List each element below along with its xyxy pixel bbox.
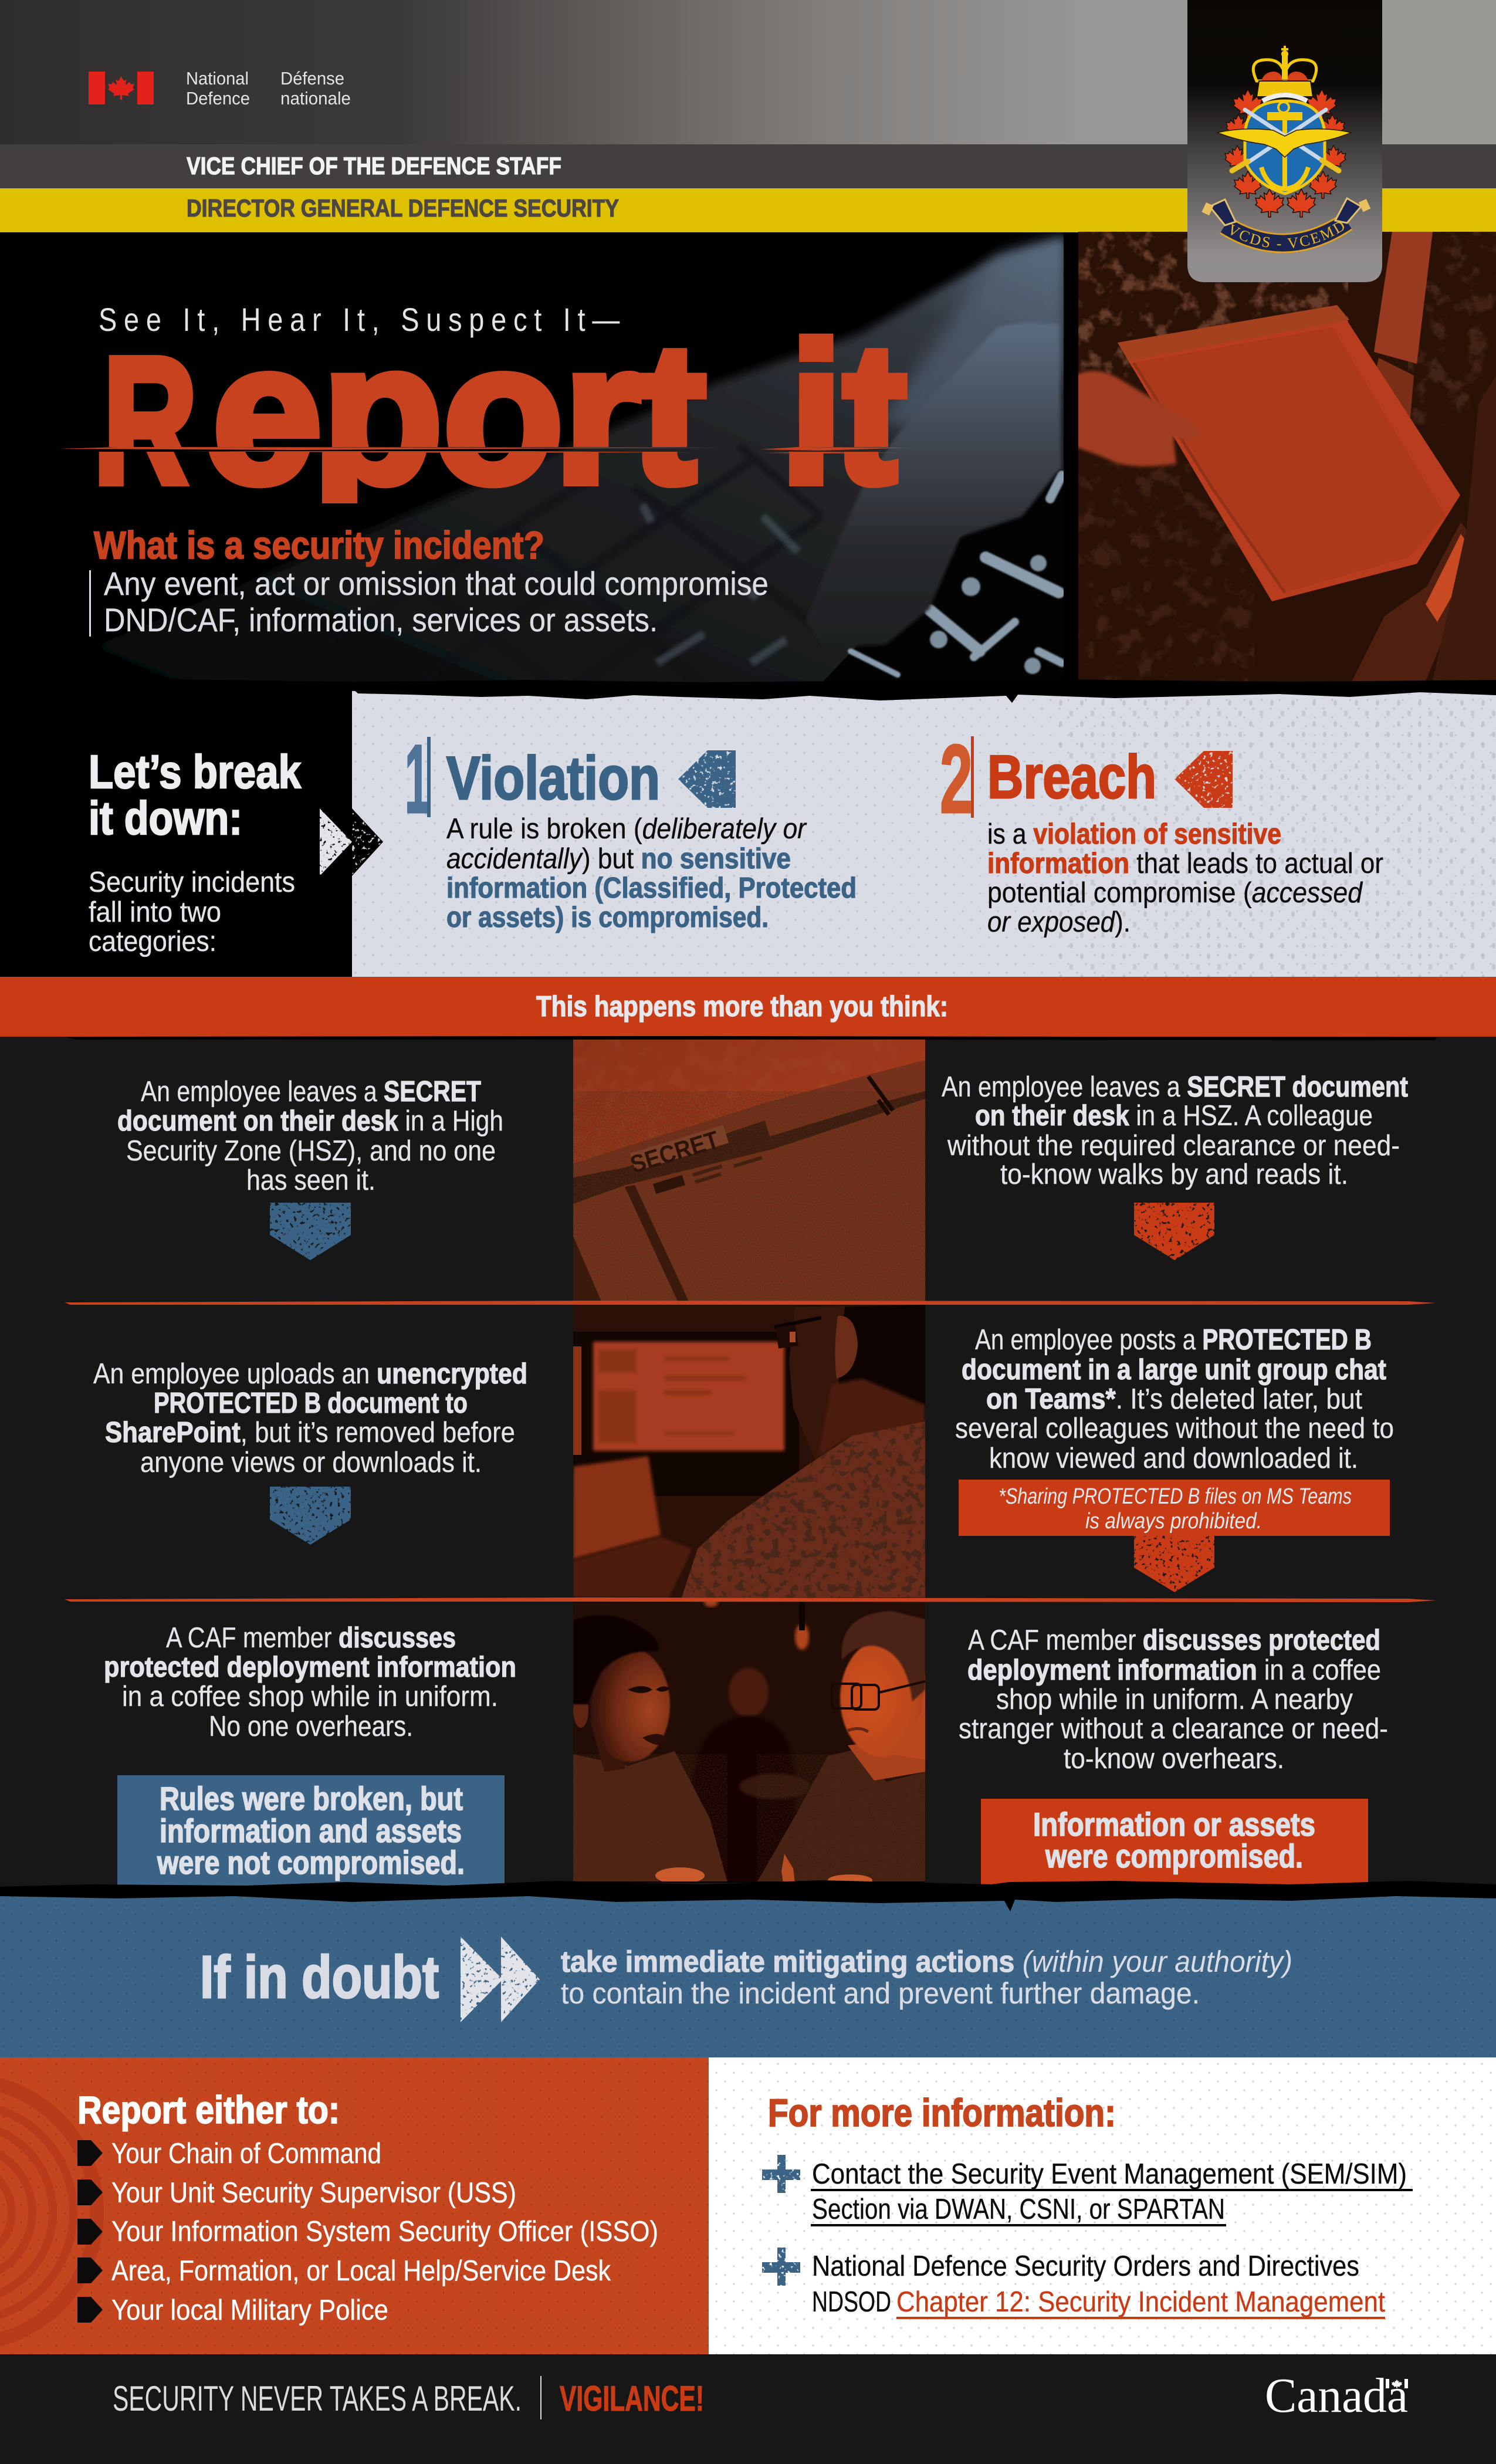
signature: department name	[186, 68, 351, 109]
arrow: blue down 2	[270, 1487, 351, 1545]
category 1: violation: A rule is broken (deliberately or	[446, 813, 807, 845]
arrow: orange down 2	[1134, 1536, 1214, 1592]
arrow: blue down 1	[270, 1203, 351, 1260]
torn edge: bottom	[0, 1880, 1496, 1911]
list: report contacts: Your Information System Security Officer (ISSO)	[111, 2216, 658, 2248]
photo: members in a coffee shop	[573, 1597, 925, 1886]
icon: plus 1	[762, 2155, 800, 2193]
scenario 1 violation: has seen it.	[246, 1165, 375, 1196]
shield	[1245, 101, 1325, 194]
eagle wings	[1217, 129, 1351, 157]
scenario 3 violation: protected deployment information	[104, 1651, 516, 1683]
callout: rules were broken: were not compromised.	[157, 1844, 465, 1881]
fingerprint rings	[0, 2080, 97, 2344]
title: Report it: eport	[212, 302, 706, 526]
link: orders and directives: National Defence Security Orders and Directives	[812, 2250, 1359, 2282]
panel: for more information: For more information:	[768, 2091, 1116, 2134]
list: report contacts: Area, Formation, or Local Help/Service Desk	[111, 2255, 611, 2287]
category 2: breach: is a violation of sensitive	[987, 818, 1281, 850]
title: Report it	[59, 333, 910, 503]
callout: information was compromised: Information or assets	[1033, 1806, 1315, 1843]
band: vice chief	[0, 144, 1496, 188]
panel: categories	[320, 691, 1496, 977]
scenario 3 breach: to-know overhears.	[1064, 1743, 1284, 1775]
header gradient band	[0, 0, 1496, 144]
list: report contacts: Your local Military Police	[111, 2294, 388, 2326]
divider: row 1	[65, 1301, 1436, 1305]
link: contact SEM/SIM: Contact the Security Event Management (SEM/SIM)	[812, 2158, 1407, 2190]
scenario 1 violation: Security Zone (HSZ), and no one	[126, 1135, 496, 1167]
text: take immediate actions: take immediate mitigating actions (within your authority)	[561, 1945, 1292, 1978]
text: take immediate actions	[561, 1945, 1292, 2010]
photo: man at monitors	[573, 1305, 925, 1597]
slogan: SECURITY NEVER TAKES A BREAK.	[113, 2379, 522, 2418]
note: sharing protected b: is always prohibited.	[1085, 1509, 1262, 1534]
scenario 3 breach: stranger without a clearance or need-	[959, 1713, 1388, 1745]
divider: row 2	[65, 1597, 1436, 1602]
scenario 3 violation: in a coffee shop while in uniform.	[122, 1681, 498, 1712]
scenario 1 breach: An employee leaves a SECRET document	[942, 1071, 1408, 1103]
photo: secret document on desk	[573, 1040, 925, 1301]
scenario 1 breach: without the required clearance or need-	[947, 1130, 1400, 1162]
swords	[1232, 110, 1339, 171]
photo: finger on keyboard	[0, 235, 1065, 686]
band: vice chief: VICE CHIEF OF THE DEFENCE STAFF	[187, 152, 561, 180]
signature: department name: nationale	[280, 88, 351, 109]
title: Report it: R	[93, 320, 187, 520]
scenario 2 breach	[955, 1324, 1394, 1474]
text: take immediate actions: to contain the incident and prevent further damage.	[561, 1976, 1200, 2010]
wordmark: Canada: Canada	[1265, 2368, 1408, 2423]
scenario 2 breach: on Teams*. It’s deleted later, but	[986, 1383, 1362, 1415]
banner: this happens more than you think	[0, 977, 1496, 1037]
band: director general: DIRECTOR GENERAL DEFENCE SECURITY	[187, 194, 619, 222]
panel: for more information	[709, 2057, 1496, 2354]
callout: information was compromised: were compromised.	[1045, 1837, 1303, 1874]
maple leaves	[1225, 89, 1346, 217]
photo divider	[1064, 232, 1079, 690]
photo: secret document on desk: SECRET	[627, 1125, 722, 1179]
panel: report either to: Report either to:	[77, 2088, 340, 2131]
list: report contacts: Your Chain of Command	[111, 2138, 381, 2169]
note: sharing protected b	[959, 1480, 1390, 1536]
scenario 3 breach	[959, 1624, 1388, 1775]
category 1: violation: information (Classified, Protected	[446, 872, 857, 904]
scenario 3 breach: A CAF member discusses protected	[968, 1624, 1380, 1656]
title: Report it: it	[790, 302, 907, 525]
scenario 2 violation: PROTECTED B document to	[154, 1387, 468, 1419]
scenario 1 breach	[942, 1071, 1408, 1190]
panel: let's break it down (left): fall into two	[89, 896, 221, 928]
scroll: VCDS - VCEMD	[1231, 222, 1344, 248]
panel: let's break it down (left): Security incidents	[89, 867, 295, 898]
panel: let's break it down (left): categories:	[89, 926, 216, 957]
footer	[0, 2354, 1496, 2464]
band: director general	[0, 188, 1496, 232]
scenario 2 violation: SharePoint, but it’s removed before	[105, 1417, 515, 1448]
crown	[1253, 46, 1316, 101]
category 1: violation	[405, 725, 857, 933]
scenario 3 violation	[104, 1622, 516, 1742]
scenario 2 breach: several colleagues without the need to	[955, 1413, 1394, 1444]
category 2: breach	[940, 725, 1383, 938]
callout: information was compromised	[981, 1799, 1368, 1887]
link: contact SEM/SIM: Section via DWAN, CSNI, or SPARTAN	[812, 2194, 1225, 2225]
title: Report it: R	[103, 320, 197, 520]
slogan: VIGILANCE!	[560, 2379, 704, 2418]
photo: hands holding document	[1075, 232, 1496, 686]
panel: hero	[0, 232, 1496, 690]
scenario 1 breach: on their desk in a HSZ. A colleague	[975, 1100, 1373, 1132]
panel: if in doubt: If in doubt	[200, 1944, 439, 2011]
scenario 2 breach: know viewed and downloaded it.	[989, 1443, 1358, 1474]
panel: if in doubt	[0, 1896, 1496, 2057]
callout: rules were broken	[117, 1775, 505, 1887]
scenario 1 violation: document on their desk in a High	[117, 1105, 503, 1137]
category 2: breach: or exposed).	[987, 906, 1131, 938]
category 2: breach: 2	[940, 725, 973, 834]
scenario 3 violation: No one overhears.	[209, 1711, 413, 1742]
panel: scenarios	[0, 1036, 1496, 1899]
anchor	[1261, 102, 1308, 189]
callout: rules were broken: Rules were broken, but	[160, 1780, 463, 1817]
heading: what is a security incident: What is a security incident?	[94, 523, 544, 567]
scenario 1 violation: An employee leaves a SECRET	[141, 1076, 481, 1108]
category 2: breach: potential compromise (accessed	[987, 877, 1363, 909]
icon: double arrow	[461, 1937, 540, 2022]
crest panel	[1187, 0, 1382, 282]
category 1: violation: Violation	[446, 744, 660, 813]
scenario 1 breach: to-know walks by and reads it.	[1000, 1159, 1348, 1190]
signature: department name: National	[186, 68, 249, 89]
scroll	[1201, 197, 1370, 253]
category 2: breach: Breach	[987, 743, 1156, 811]
category 1: violation: or assets) is compromised.	[446, 902, 769, 933]
panel: let's break it down (left): it down:	[89, 792, 242, 844]
note: sharing protected b: *Sharing PROTECTED B files on MS Teams	[999, 1484, 1352, 1509]
link: contact SEM/SIM	[811, 2158, 1413, 2226]
category 1: violation: 1	[405, 725, 429, 834]
definition text: Any event, act or omission that could compromise	[104, 565, 769, 602]
category 1: violation: accidentally) but no sensitive	[446, 843, 791, 875]
icon: VCDS crest	[1201, 46, 1370, 253]
scenario 2 breach: An employee posts a PROTECTED B	[975, 1324, 1372, 1356]
scenario 2 breach: document in a large unit group chat	[962, 1354, 1386, 1386]
scenario 2 violation: anyone views or downloads it.	[140, 1447, 482, 1478]
icon: chevron	[320, 808, 383, 876]
signature: department name: Defence	[186, 88, 250, 109]
title: Report it: it	[780, 302, 897, 525]
list: report contacts: Your Unit Security Supervisor (USS)	[111, 2177, 516, 2209]
banner: this happens more than you think: This happens more than you think:	[536, 991, 948, 1023]
link: orders and directives	[812, 2250, 1385, 2319]
scenario 3 breach: shop while in uniform. A nearby	[996, 1684, 1353, 1715]
icon: plus 2	[762, 2248, 800, 2286]
torn edge: top	[0, 679, 1496, 703]
definition text: DND/CAF, information, services or assets.	[104, 601, 658, 638]
scenario 2 violation	[93, 1358, 527, 1478]
arrow: orange down 1	[1134, 1203, 1214, 1260]
title: Report it: eport	[202, 302, 696, 526]
panel: report either to	[0, 2057, 709, 2354]
panel: let's break it down (left): Let’s break	[89, 746, 301, 798]
list: report contacts	[77, 2138, 658, 2326]
scenario 2 violation: An employee uploads an unencrypted	[93, 1358, 527, 1390]
panel: let's break it down (left)	[0, 686, 352, 977]
signature: Canadian flag	[89, 72, 154, 104]
link: orders and directives: NDSOD	[812, 2286, 891, 2318]
signature: department name: Défense	[280, 68, 344, 89]
tagline: See It, Hear It, Suspect It—	[99, 301, 627, 338]
category 2: breach: information that leads to actual or	[987, 848, 1383, 879]
definition text	[89, 565, 769, 638]
scenario 1 violation	[117, 1076, 503, 1196]
link: orders and directives: Chapter 12: Security Incident Management	[896, 2286, 1385, 2318]
scenario 3 violation: A CAF member discusses	[166, 1622, 456, 1654]
callout: rules were broken: information and assets	[160, 1812, 462, 1849]
scenario 3 breach: deployment information in a coffee	[967, 1654, 1381, 1686]
